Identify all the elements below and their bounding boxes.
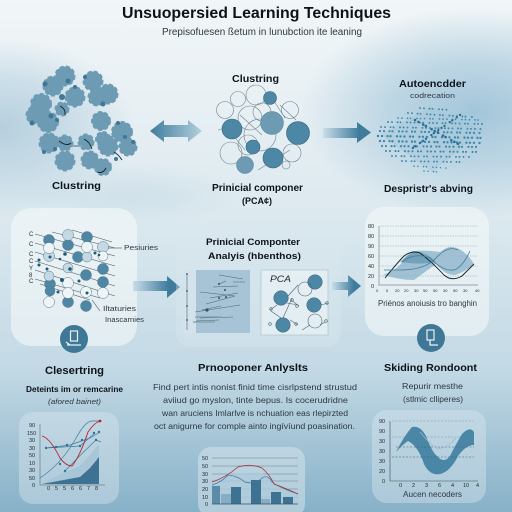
caption: Priénos anoiusis tro banghin	[378, 299, 477, 308]
panel: lattice	[11, 208, 159, 346]
axis labels: 0	[205, 502, 208, 508]
axis labels: 150	[27, 431, 36, 437]
lattice lines	[35, 230, 115, 300]
axis labels: 30	[29, 468, 35, 474]
heading: clesertring: Clesertring	[45, 365, 104, 377]
axis labels: 30	[202, 479, 208, 485]
right arrow top	[323, 122, 371, 143]
icon: device right	[417, 324, 445, 352]
clustering blob illustration	[26, 66, 136, 175]
panel: wave chart	[365, 207, 489, 336]
paragraph: aviiud go myslon, tinte bepus. Is cocerudridne	[163, 395, 348, 405]
subheading	[402, 382, 464, 404]
heading: skiding rondoont: Skiding Rondoont	[384, 362, 478, 374]
label: iltaturies	[92, 300, 145, 324]
chart: scatter lines	[183, 270, 250, 333]
axis labels: 90	[29, 423, 35, 429]
axis labels: 30	[414, 288, 419, 293]
lattice row letters: C	[29, 259, 34, 265]
axis labels: 5	[55, 486, 58, 492]
autoencoder subheading: codrecation	[410, 91, 455, 100]
panel: pca diagram	[261, 270, 328, 335]
axis labels: 30	[463, 288, 468, 293]
paragraph: oct anigurne for comple ainto ingívíund poasination.	[154, 421, 355, 431]
principal component label: (PCA¢)	[242, 196, 272, 207]
lattice row letters: C	[29, 232, 34, 238]
axis labels: 6	[79, 486, 82, 492]
axis labels: 90	[368, 244, 374, 250]
axis labels: 50	[453, 288, 458, 293]
caption: Aucen necoders	[403, 490, 462, 499]
lattice row letters: C	[29, 242, 34, 248]
panel: bar chart	[198, 447, 305, 512]
label: pesiuries	[108, 245, 159, 252]
axis labels: 50	[202, 456, 208, 462]
axis labels: 90	[379, 419, 385, 425]
title: Unsuopersied Learning Techniques	[122, 5, 391, 22]
descriptor label: Despristr's abving	[384, 184, 473, 195]
axis labels: 30	[379, 449, 385, 455]
axis labels: 10	[202, 495, 208, 501]
axis labels: 30	[379, 459, 385, 465]
axis labels: 50	[29, 453, 35, 459]
axis labels: 2	[412, 483, 415, 489]
principal component label: Prinicial componer	[212, 183, 303, 194]
arrow: lattice to pca	[133, 276, 180, 298]
autoencoder scatter	[378, 107, 484, 172]
heading: Prinicial Componter	[206, 237, 300, 248]
double arrow	[150, 120, 202, 142]
axis labels: 20	[202, 487, 208, 493]
panel: pca diagram: PCA	[270, 274, 291, 284]
axis labels: 7	[87, 486, 90, 492]
heading: Analyis (hbenthos)	[208, 251, 301, 262]
lattice row letters: C	[29, 279, 34, 285]
axis labels	[368, 224, 480, 293]
clustering label: Clustring	[52, 180, 101, 192]
axis labels: 10	[463, 483, 469, 489]
axis labels: 30	[443, 288, 448, 293]
axis labels: 4	[476, 483, 479, 489]
axis labels: 60	[368, 254, 374, 260]
label: iltaturies: Iltaturies	[103, 306, 137, 313]
subheading: Repurir mesthe	[402, 382, 464, 391]
axis labels: 0	[371, 284, 374, 290]
axis labels: 30	[379, 439, 385, 445]
panel: line area chart	[19, 412, 119, 504]
grid	[380, 226, 478, 276]
axis labels: 5	[63, 486, 66, 492]
axis labels: 8	[95, 486, 98, 492]
axis labels: 20	[368, 274, 374, 280]
icon: device left	[60, 325, 88, 353]
axis labels: 30	[29, 446, 35, 452]
autoencoder heading: Autoencdder	[399, 78, 466, 90]
axis labels: 0	[382, 479, 385, 485]
axis labels: 4	[451, 483, 454, 489]
label: iltaturies: Inascarnies	[105, 317, 145, 324]
label: pesiuries: Pesiuries	[124, 245, 159, 252]
note: (afored bainet)	[48, 397, 102, 406]
axis labels: 90	[379, 429, 385, 435]
panel: band chart	[372, 410, 486, 503]
axis labels: 40	[475, 288, 480, 293]
circle network illustration	[216, 85, 310, 174]
axis labels: 50	[29, 476, 35, 482]
axis labels: 30	[29, 438, 35, 444]
clustering heading center: Clustring	[232, 74, 279, 85]
lattice row letters	[29, 232, 34, 285]
axis labels: 0	[386, 288, 389, 293]
axis labels: 80	[368, 224, 374, 230]
axis labels: 6	[71, 486, 74, 492]
paragraph: Find pert intis nonist finid time cisrlpstend strustud	[153, 382, 357, 392]
axis labels: 0	[47, 486, 50, 492]
axis labels: 0	[32, 483, 35, 489]
axis labels: 20	[404, 288, 409, 293]
axis labels	[202, 456, 208, 508]
axis labels: 20	[379, 469, 385, 475]
axis labels: 80	[368, 234, 374, 240]
axis labels: 30	[202, 472, 208, 478]
axis labels: 50	[433, 288, 438, 293]
axis labels	[379, 419, 479, 489]
panel: principal component	[176, 235, 341, 347]
axis labels: 40	[368, 264, 374, 270]
arrow: pca to chart	[332, 275, 361, 297]
subtitle: Prepisofuesen ßetum in lunubction ite leaning	[162, 27, 362, 38]
axis labels: 6	[438, 483, 441, 489]
axis labels: 50	[202, 464, 208, 470]
paragraph	[153, 382, 357, 431]
lattice row letters: 8	[29, 273, 33, 279]
axis labels: 10	[29, 461, 35, 467]
subheading: Deteints im or remcarine	[26, 384, 123, 394]
axis labels: 0	[376, 288, 379, 293]
lattice row letters: Y	[29, 266, 33, 272]
axis labels	[27, 423, 98, 492]
wave areas	[383, 247, 474, 280]
principal component label	[212, 183, 303, 207]
lattice row letters: C	[29, 252, 34, 258]
paragraph: wan aruciens Imlarlve is nchuation eas rlepirzted	[161, 408, 348, 418]
heading: component analysis: Prnooponer Anlyslts	[198, 362, 308, 374]
subheading: (stlmic clliperes)	[403, 395, 463, 404]
heading	[206, 237, 301, 262]
axis labels: 3	[425, 483, 428, 489]
lattice nodes	[38, 230, 108, 312]
axis labels: 50	[423, 288, 428, 293]
axis labels: 20	[395, 288, 400, 293]
axis labels: 0	[399, 483, 402, 489]
